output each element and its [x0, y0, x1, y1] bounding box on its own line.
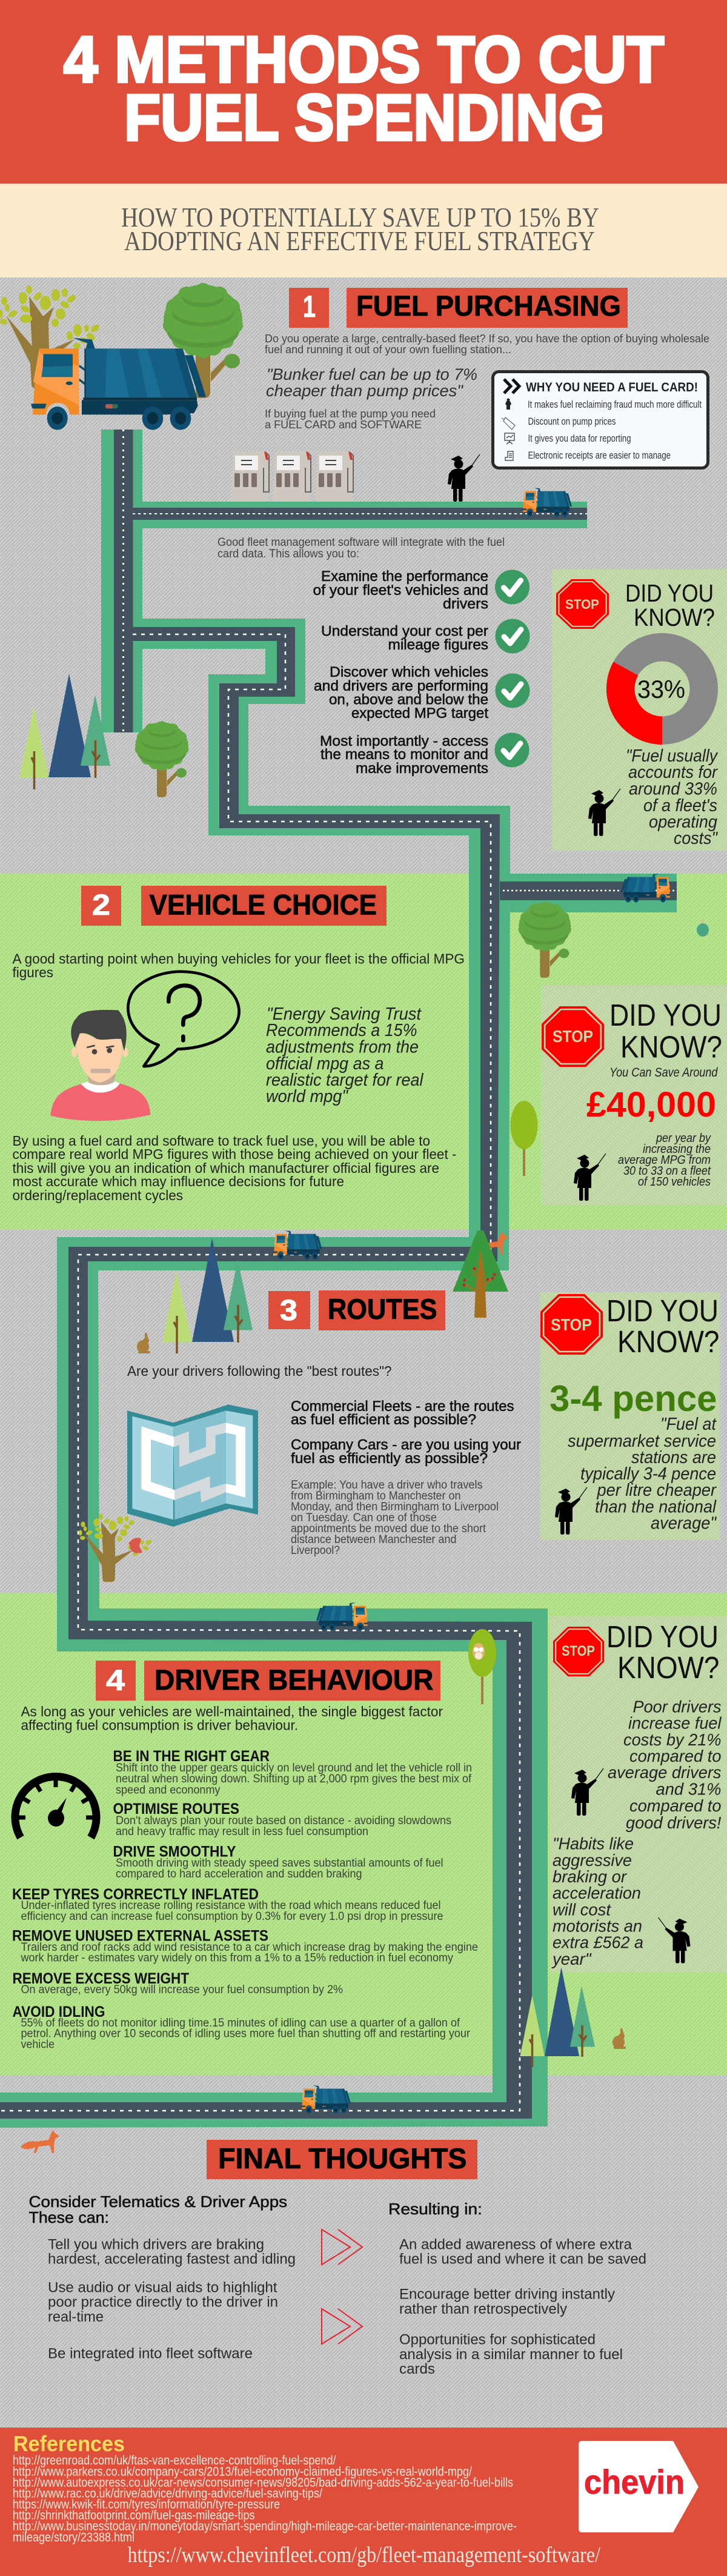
- heading: fuel purchasing: FUEL PURCHASING: [356, 290, 621, 322]
- quote: fuel cost: around 33%: [629, 779, 717, 798]
- references list: http://www.parkers.co.uk/company-cars/2013/fuel-economy-claimed-figures-vs-real-world-mpg/: [13, 2465, 472, 2479]
- references list: http://shrinkthatfootprint.com/fuel-gas-mileage-tips: [13, 2508, 254, 2523]
- software text: card data. This allows you to:: [217, 548, 359, 560]
- bold questions: fuel as efficiently as possible?: [291, 1450, 488, 1467]
- icon: rabbit: [612, 2028, 626, 2049]
- icon: person with question bubble: [50, 972, 239, 1121]
- tip: remove unused external assets: REMOVE UNUSED EXTERNAL ASSETS: [12, 1928, 268, 1945]
- did you know heading: DID YOU: [625, 579, 714, 607]
- quote: habits: extra £562 a: [553, 1933, 643, 1952]
- heading: number 2: [81, 886, 121, 926]
- icon: stop sign: [553, 1627, 604, 1676]
- right column list: fuel is used and where it can be saved: [399, 2251, 646, 2267]
- donut chart: [606, 647, 704, 745]
- icon: turtle: [697, 920, 709, 937]
- icon: green tree: [519, 901, 571, 978]
- quote: supermarket fuel: [568, 1415, 717, 1533]
- saving value: £40,000: [586, 1085, 716, 1124]
- saving note: per year by: [656, 1132, 711, 1145]
- icon: fuel pumps: [229, 451, 355, 502]
- check item 3: and drivers are performing: [314, 678, 488, 694]
- check item 1: drivers: [443, 596, 488, 612]
- quote: bunker fuel: [266, 365, 477, 400]
- tip: keep tyres correctly inflated: KEEP TYRES CORRECTLY INFLATED: [12, 1886, 259, 1903]
- header banner: [0, 0, 727, 184]
- intro text: As long as your vehicles are well-maintained, the single biggest factor: [21, 1704, 443, 1719]
- right column list: [399, 2237, 646, 2377]
- heading: number 3: [268, 1291, 310, 1329]
- check item 3: expected MPG target: [351, 705, 488, 722]
- icon: conifer trees: [162, 1238, 253, 1353]
- stat: poor drivers: compared to: [629, 1747, 721, 1765]
- quote: supermarket fuel: average": [651, 1513, 717, 1533]
- quote: habits: "Habits like: [553, 1834, 634, 1853]
- quote: supermarket fuel: per litre cheaper: [597, 1481, 717, 1500]
- icon: teacher pointing: [571, 1768, 603, 1816]
- references list: http://www.businesstoday.in/moneytoday/smart-spending/high-mileage-car-better-maintenance-improve-: [13, 2519, 517, 2534]
- quote: fuel cost: [626, 746, 719, 848]
- saving note: 30 to 33 on a fleet: [623, 1164, 711, 1178]
- quote: bunker fuel: cheaper than pump prices": [266, 382, 463, 400]
- tip: keep tyres correctly inflated: efficiency and can increase fuel consumption by 0.3% for every 1.0 psi drop in pressure: [21, 1910, 443, 1923]
- software text: Good fleet management software will integrate with the fuel: [217, 536, 505, 549]
- pump text: a FUEL CARD and SOFTWARE: [265, 419, 422, 431]
- heading: vehicle choice: VEHICLE CHOICE: [149, 888, 377, 921]
- tip: avoid idling: AVOID IDLING: [12, 2003, 105, 2020]
- icon: teacher pointing: [448, 454, 480, 502]
- quote: energy saving trust: "Energy Saving Trust: [267, 1004, 422, 1024]
- icon: stop sign: STOP: [551, 1315, 592, 1334]
- icon: large truck: [31, 338, 206, 430]
- quote: supermarket fuel: "Fuel at: [660, 1415, 717, 1434]
- panel: did you know 3-4 pence: [540, 1292, 720, 1540]
- references list: [13, 2454, 517, 2544]
- icon: red berry tree: [453, 1230, 508, 1318]
- tip: avoid idling: 55% of fleets do not monitor idling time.15 minutes of idling can use a quarter of a gallon of: [21, 2017, 460, 2030]
- section: final thoughts: [21, 2085, 646, 2377]
- tip: remove unused external assets: work harder - estimates vary widely on this from a 1% to a 15% reduction in fuel economy: [21, 1952, 453, 1964]
- heading: number 2: 2: [92, 889, 110, 921]
- quote: habits: braking or: [553, 1867, 628, 1886]
- tip: remove excess weight: REMOVE EXCESS WEIGHT: [12, 1970, 189, 1987]
- tip: drive smoothly: DRIVE SMOOTHLY: [113, 1843, 236, 1860]
- example text: from Birmingham to Manchester on: [291, 1490, 460, 1502]
- intro text: [265, 333, 709, 356]
- tip: be in the right gear: speed and econonmy: [116, 1784, 221, 1797]
- quote: energy saving trust: Recommends a 15%: [266, 1021, 417, 1040]
- quote: fuel cost: costs": [674, 829, 719, 848]
- check item 2: [321, 619, 529, 653]
- saving note: average MPG from: [618, 1154, 711, 1167]
- references heading: References: [13, 2431, 125, 2456]
- heading: final thoughts: FINAL THOUGHTS: [218, 2142, 466, 2174]
- subtitle band: [0, 184, 727, 277]
- question text: Are your drivers following the "best routes"?: [127, 1363, 391, 1379]
- heading: number 3: 3: [280, 1295, 297, 1327]
- heading: number 1: 1: [303, 290, 316, 324]
- icon: speedometer: [15, 1776, 96, 1837]
- bold questions: [291, 1398, 521, 1467]
- did you know heading: [609, 998, 722, 1064]
- icon: map: [127, 1404, 258, 1527]
- tip: optimise routes: OPTIMISE ROUTES: [113, 1801, 239, 1817]
- quote: habits: acceleration: [553, 1884, 641, 1902]
- logo: chevin: chevin: [584, 2463, 685, 2501]
- stat: poor drivers: average drivers: [608, 1763, 721, 1782]
- quote: habits: motorists an: [553, 1917, 642, 1935]
- software text: [217, 536, 505, 560]
- icon: chevrons: [504, 379, 519, 393]
- heading: driver behaviour: DRIVER BEHAVIOUR: [154, 1664, 434, 1696]
- icon: teacher pointing: [574, 1154, 606, 1201]
- intro text: affecting fuel consumption is driver behaviour.: [21, 1717, 298, 1733]
- icon: stop sign: [542, 1006, 604, 1067]
- check item 1: of your fleet's vehicles and: [313, 582, 488, 599]
- pump text: If buying fuel at the pump you need: [265, 408, 436, 420]
- icon: conifer trees: [520, 1967, 595, 2067]
- panel: did you know poor drivers: [549, 1616, 727, 1973]
- tip: be in the right gear: [113, 1748, 472, 1797]
- left column list: real-time: [48, 2309, 104, 2325]
- checklist: [313, 568, 529, 777]
- check item 2: Understand your cost per: [321, 623, 488, 640]
- heading: routes: ROUTES: [328, 1293, 437, 1325]
- quote: energy saving trust: official mpg as a: [266, 1054, 384, 1074]
- quote: supermarket fuel: stations are: [631, 1448, 716, 1467]
- check item 2: mileage figures: [388, 637, 488, 653]
- check item 4: the means to monitor and: [320, 746, 488, 763]
- quote: habits: aggressive: [553, 1851, 632, 1870]
- stat: poor drivers: increase fuel: [628, 1713, 722, 1733]
- quote: supermarket fuel: typically 3-4 pence: [580, 1464, 716, 1484]
- tip: keep tyres correctly inflated: [12, 1886, 443, 1923]
- paragraph: [12, 1133, 457, 1203]
- tip: avoid idling: vehicle: [21, 2038, 55, 2051]
- icon: green tree: [135, 721, 188, 797]
- saving note: [618, 1132, 711, 1189]
- icon: yellow-leaf tree with bird: [79, 1514, 153, 1582]
- tip: remove unused external assets: [12, 1928, 478, 1964]
- tip: optimise routes: [113, 1801, 451, 1838]
- quote: energy saving trust: world mpg": [266, 1087, 349, 1106]
- tip: remove excess weight: On average, every 50kg will increase your fuel consumption by 2%: [21, 1983, 343, 1996]
- example text: appointments be moved due to the short: [291, 1522, 486, 1535]
- icon: small truck: [522, 488, 572, 517]
- right column list: rather than retrospectively: [399, 2301, 567, 2317]
- left column list: Be integrated into fleet software: [48, 2346, 253, 2362]
- heading: number 4: 4: [106, 1665, 125, 1697]
- card list: Electronic receipts are easier to manage: [528, 450, 671, 461]
- example text: distance between Manchester and: [291, 1533, 457, 1546]
- panel: did you know 33%: [552, 569, 727, 851]
- did you know heading: [625, 579, 715, 631]
- icon: truck: [273, 1230, 322, 1260]
- example text: Monday, and then Birmingham to Liverpool: [291, 1501, 499, 1513]
- intro text: [21, 1704, 443, 1733]
- arrow: double chevron: [322, 2309, 362, 2344]
- check item 4: make improvements: [356, 760, 488, 777]
- check item 4: [320, 733, 529, 777]
- section 3: routes: [79, 1230, 720, 1582]
- tip: keep tyres correctly inflated: Under-inflated tyres increase rolling resistance with the road which means reduced fuel: [21, 1899, 441, 1912]
- icon: fox: [21, 2130, 59, 2153]
- left column list: [48, 2237, 296, 2362]
- left column list: Use audio or visual aids to highlight: [48, 2279, 277, 2296]
- card title: WHY YOU NEED A FUEL CARD!: [526, 380, 698, 394]
- title: [64, 22, 664, 154]
- intro text: A good starting point when buying vehicles for your fleet is the official MPG: [12, 951, 465, 967]
- check item 3: Discover which vehicles: [330, 664, 488, 680]
- check item 4: Most importantly - access: [320, 733, 488, 749]
- website url: https://www.chevinfleet.com/gb/fleet-management-software/: [127, 2543, 601, 2568]
- heading: number 4: [96, 1661, 136, 1701]
- section 4: driver behaviour: [12, 1602, 727, 2067]
- icon: truck: [316, 1602, 368, 1631]
- tip: be in the right gear: BE IN THE RIGHT GEAR: [113, 1748, 270, 1765]
- check item 1: [313, 568, 529, 612]
- quote: bunker fuel: "Bunker fuel can be up to 7%: [267, 365, 477, 383]
- icon: stop sign: STOP: [565, 597, 599, 612]
- stat: poor drivers: and 31%: [656, 1780, 721, 1798]
- value: 3-4 pence: [549, 1378, 717, 1419]
- icon: cypress tree: [510, 1101, 538, 1176]
- icon: truck: [621, 874, 671, 902]
- tip: drive smoothly: compared to hard acceleration and sudden braking: [116, 1868, 362, 1881]
- stat: poor drivers: [608, 1698, 722, 1832]
- intro text: [12, 951, 465, 980]
- tip: optimise routes: Don't always plan your route based on distance - avoiding slowdowns: [116, 1814, 451, 1827]
- paragraph: compare real world MPG figures with those being achieved on your fleet -: [12, 1146, 457, 1162]
- icon: green tree: [163, 283, 243, 398]
- icon: truck: [301, 2085, 351, 2114]
- example text: on Tuesday. Can one of those: [291, 1512, 437, 1524]
- title: 4 METHODS TO CUT: [64, 22, 664, 96]
- check item 1: Examine the performance: [321, 568, 488, 585]
- road network: [0, 430, 677, 2128]
- donut chart: 33%: [637, 675, 685, 703]
- did you know heading: [606, 1619, 720, 1685]
- icon: fox: [470, 1232, 508, 1255]
- tip: avoid idling: [12, 2003, 471, 2051]
- title: FUEL SPENDING: [124, 81, 605, 154]
- tip: optimise routes: and heavy traffic may result in less fuel consumption: [116, 1825, 368, 1838]
- section 1: fuel purchasing: [217, 288, 727, 851]
- intro text: figures: [12, 964, 53, 980]
- intro text: fuel and running it out of your own fuelling station...: [265, 344, 511, 356]
- intro text: Do you operate a large, centrally-based fleet? If so, you have the option of buying wholesale: [265, 333, 709, 345]
- quote: habits: year": [551, 1950, 592, 1968]
- quote: energy saving trust: adjustments from the: [266, 1037, 419, 1057]
- subtitle text: HOW TO POTENTIALLY SAVE UP TO 15% BY: [121, 202, 599, 233]
- arrow: double chevron: [322, 2229, 362, 2265]
- quote: energy saving trust: realistic target for real: [266, 1071, 424, 1090]
- quote: habits: [551, 1834, 643, 1968]
- quote: fuel cost: of a fleet's: [643, 796, 717, 815]
- example text: Example: You have a driver who travels: [291, 1479, 482, 1492]
- right column heading: Resulting in:: [388, 2200, 482, 2218]
- paragraph: By using a fuel card and software to track fuel use, you will be able to: [12, 1133, 430, 1149]
- right column list: Opportunities for sophisticated: [399, 2331, 596, 2348]
- pump text: [265, 408, 436, 431]
- stat: poor drivers: good drivers!: [626, 1813, 722, 1832]
- card list: [528, 399, 702, 461]
- saving note: of 150 vehicles: [638, 1175, 711, 1189]
- saving note: increasing the: [643, 1143, 711, 1156]
- icon: teacher pointing: [588, 789, 620, 836]
- tip: be in the right gear: neutral when slowing down. Shifting up at 2,000 rpm gives the best mix of: [116, 1773, 472, 1785]
- stat: poor drivers: Poor drivers: [632, 1698, 721, 1716]
- references list: mileage/story/23388.html: [13, 2531, 134, 2544]
- logo: chevin: [579, 2441, 699, 2532]
- check item 3: [314, 664, 529, 722]
- tip: remove unused external assets: Trailers and roof racks add wind resistance to a car which increase drag by making the engine: [21, 1941, 478, 1954]
- bold questions: Commercial Fleets - are the routes: [291, 1398, 514, 1415]
- icon: cypress tree with owl: [468, 1629, 496, 1704]
- panel: did you know 40,000: [541, 985, 727, 1205]
- bold questions: as fuel efficient as possible?: [291, 1412, 476, 1428]
- icon: stop sign: [540, 1294, 603, 1355]
- paragraph: ordering/replacement cycles: [12, 1187, 183, 1203]
- subtitle text: ADOPTING AN EFFECTIVE FUEL STRATEGY: [124, 225, 595, 256]
- quote: energy saving trust: [266, 1004, 424, 1106]
- references list: http://www.autoexpress.co.uk/car-news/consumer-news/98205/bad-driving-adds-562-a-year-to-fuel-bills: [13, 2475, 513, 2490]
- stat: poor drivers: costs by 21%: [623, 1730, 721, 1749]
- stat: poor drivers: compared to: [629, 1796, 721, 1815]
- example text: Liverpool?: [291, 1544, 340, 1557]
- icon: conifer trees: [19, 674, 110, 789]
- left column heading: Consider Telematics & Driver Apps: [29, 2193, 287, 2211]
- left column heading: These can:: [29, 2208, 109, 2226]
- card list: Discount on pump prices: [528, 416, 616, 427]
- quote: supermarket fuel: supermarket service: [568, 1432, 716, 1451]
- icon: teacher pointing: [555, 1487, 587, 1535]
- paragraph: this will give you an indication of which manufacturer official figures are: [12, 1160, 439, 1176]
- right column list: Encourage better driving instantly: [399, 2286, 615, 2302]
- references list: http://greenroad.com/uk/ftas-van-excellence-controlling-fuel-spend/: [13, 2454, 336, 2468]
- icon: stop sign: [556, 579, 609, 629]
- footer: [0, 2428, 727, 2576]
- check item 3: on, above and below the: [329, 692, 488, 708]
- quote: fuel cost: "Fuel usually: [626, 746, 718, 766]
- icon: stop sign: STOP: [553, 1027, 593, 1046]
- tip: be in the right gear: Shift into the upper gears quickly on level ground and let the vehicle roll in: [116, 1762, 472, 1774]
- icon: teacher pointing left: [658, 1917, 691, 1964]
- bold questions: Company Cars - are you using your: [291, 1437, 521, 1453]
- did you know heading: [606, 1293, 720, 1359]
- heading: number 1: [289, 288, 329, 328]
- right column list: cards: [399, 2361, 435, 2377]
- left column list: poor practice directly to the driver in: [48, 2294, 278, 2311]
- icon: stop sign: STOP: [562, 1643, 595, 1659]
- tip: drive smoothly: [113, 1843, 443, 1881]
- tip: remove excess weight: [12, 1970, 343, 1996]
- references list: https://www.kwik-fit.com/tyres/information/tyre-pressure: [13, 2497, 280, 2512]
- card: why you need a fuel card: [493, 372, 708, 468]
- quote: fuel cost: operating: [649, 812, 717, 832]
- tip: drive smoothly: Smooth driving with steady speed saves substantial amounts of fuel: [116, 1857, 443, 1870]
- tip: avoid idling: petrol. Anything over 10 seconds of idling uses more fuel than shutting off and restarting your: [21, 2027, 471, 2040]
- right column list: An added awareness of where extra: [399, 2237, 632, 2252]
- left column list: hardest, accelerating fastest and idling: [48, 2251, 296, 2267]
- left column heading: [29, 2193, 287, 2226]
- icon: rabbit: [137, 1333, 150, 1353]
- references list: http://www.rac.co.uk/drive/advice/driving-advice/fuel-saving-tips/: [13, 2486, 322, 2501]
- example text: [291, 1479, 499, 1557]
- card icons: [502, 399, 515, 460]
- section 2: vehicle choice: [12, 874, 727, 1205]
- quote: fuel cost: accounts for: [628, 763, 718, 782]
- left column list: Tell you which drivers are braking: [48, 2237, 264, 2252]
- quote: habits: will cost: [553, 1900, 611, 1919]
- subtitle text: [121, 202, 599, 256]
- paragraph: most accurate which may influence decisions for future: [12, 1173, 344, 1189]
- right column list: analysis in a similar manner to fuel: [399, 2346, 623, 2363]
- did you know heading: KNOW?: [634, 603, 715, 631]
- card list: It gives you data for reporting: [528, 433, 631, 444]
- icon: yellow-leaf tree: [0, 285, 101, 388]
- quote: supermarket fuel: than the national: [595, 1498, 717, 1517]
